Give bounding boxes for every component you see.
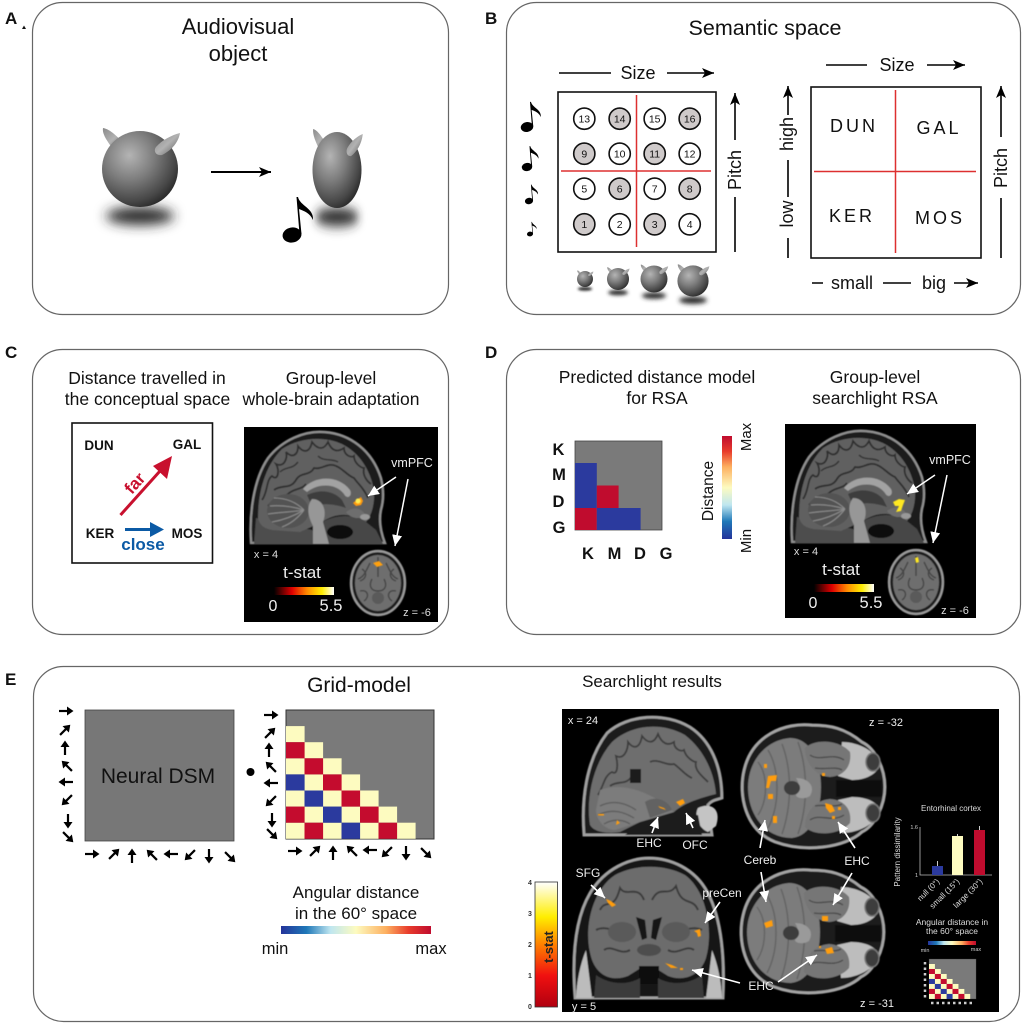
panel C right heading: whole-brain adaptation: [241, 389, 420, 409]
searchlight heading: Searchlight results: [582, 672, 722, 691]
angular distance legend: max: [415, 940, 447, 958]
panel A heading: object: [209, 41, 267, 66]
panel A: audiovisual object: [32, 2, 448, 314]
stimulus grid: 12: [684, 148, 696, 160]
stray marker near label A: [22, 26, 26, 29]
inset legend: angular distance: min: [921, 948, 929, 954]
direction arrows: neural DSM columns: [85, 846, 238, 865]
panel label E: E: [5, 670, 16, 689]
inset legend: angular distance: max: [971, 947, 981, 953]
bar chart: entorhinal cortex: 1.6: [910, 825, 918, 831]
right size axis: [826, 55, 965, 75]
bar chart: entorhinal cortex: Entorhinal cortex: [921, 804, 981, 813]
dot product symbol: [246, 768, 254, 776]
slice coordinates: z = -6: [403, 607, 431, 619]
t-stat colour bar: 5.5: [320, 597, 342, 615]
t-stat colour bar: t-stat: [822, 560, 860, 579]
white pointer arrows: [591, 813, 855, 983]
bar chart: entorhinal cortex: large (30°): [952, 877, 985, 910]
brain: sagittal x = 24: [583, 717, 722, 835]
activation blobs: [353, 497, 383, 567]
icon: music note: [281, 197, 313, 244]
arrow: object morph: [211, 171, 271, 173]
stimulus grid: [558, 92, 716, 252]
panel B frame: [506, 2, 1020, 314]
right pitch axis: Pitch: [991, 148, 1011, 188]
semantic quadrant grid: KER: [829, 206, 875, 226]
t-stat vertical colour bar: 3: [528, 911, 532, 918]
bar chart: entorhinal cortex: null (0°): [915, 877, 942, 903]
label: close: close: [121, 535, 165, 554]
direction arrows: model columns: [288, 843, 434, 861]
left size axis: Size: [620, 63, 656, 83]
neural DSM matrix: [85, 710, 234, 841]
panel E heading: Grid-model: [307, 674, 411, 697]
panel C frame: [32, 350, 448, 634]
stimulus grid: 3: [652, 219, 658, 231]
conceptual space box: [72, 423, 212, 563]
inset legend: angular distance: Angular distance in: [916, 917, 988, 927]
panel D right heading: Group-level: [830, 367, 920, 387]
low-high axis: [777, 86, 797, 258]
label: vmPFC: vmPFC: [929, 453, 971, 467]
stimulus grid: 4: [687, 219, 693, 231]
slice coordinates: [254, 549, 431, 619]
inset legend: angular distance: the 60° space: [926, 926, 978, 936]
t-stat colour bar: t-stat: [283, 563, 321, 582]
semantic quadrant grid: MOS: [915, 208, 965, 228]
anatomical labels: SFG: [576, 866, 600, 880]
arrows to vmPFC: [907, 475, 947, 543]
anatomical labels: Cereb: [744, 853, 777, 867]
stimulus grid: 13: [578, 114, 590, 126]
small-big axis: small: [831, 273, 873, 293]
t-stat colour bar: [809, 560, 882, 612]
slice coordinates: [568, 715, 903, 1013]
activation blobs: [893, 499, 919, 563]
slice coordinates: x = 4: [254, 549, 278, 561]
stimulus grid: 16: [684, 114, 696, 126]
predicted distance matrix: K: [553, 441, 565, 459]
stimulus grid: 11: [649, 148, 660, 160]
angular distance legend: Angular distance: [293, 883, 419, 902]
grid model matrix: [286, 710, 434, 839]
stimulus grid: 7: [652, 184, 658, 196]
activation blobs: [598, 764, 841, 970]
t-stat vertical colour bar: t-stat: [541, 930, 556, 963]
icon: tall creature: [312, 129, 363, 226]
distance colour bar: Min: [738, 529, 755, 553]
panel A heading: Audiovisual: [182, 14, 294, 39]
inset legend: angular distance: [916, 917, 988, 999]
panel D left heading: Predicted distance model: [559, 367, 755, 387]
small-big axis: big: [922, 273, 946, 293]
predicted distance matrix: D: [553, 493, 565, 511]
angular distance legend: [262, 883, 447, 958]
left pitch axis: Pitch: [725, 150, 745, 190]
panel C left heading: Distance travelled in: [68, 368, 226, 388]
label: far: far: [121, 469, 149, 498]
panel C: adaptation: [32, 350, 448, 634]
searchlight brain maps: [562, 709, 999, 1013]
brain: axial z = -31: [741, 870, 884, 993]
slice coordinates: z = -32: [869, 717, 903, 729]
t-stat colour bar: 5.5: [860, 594, 882, 612]
panel C left heading: the conceptual space: [65, 389, 230, 409]
panel label C: C: [5, 343, 17, 362]
distance colour bar: [700, 422, 755, 553]
anatomical labels: [576, 836, 870, 993]
neural DSM matrix: Neural DSM: [101, 765, 215, 788]
stimulus grid: 15: [649, 114, 661, 126]
stimulus grid: 2: [617, 219, 623, 231]
panel D frame: [506, 350, 1020, 634]
angular distance legend: in the 60° space: [295, 904, 417, 923]
slice coordinates: y = 5: [572, 1001, 596, 1013]
conceptual space box: GAL: [173, 437, 201, 452]
direction arrows: model rows: [262, 710, 280, 842]
bar chart: entorhinal cortex: 1: [915, 873, 918, 879]
t-stat vertical colour bar: 0: [528, 1004, 532, 1011]
predicted distance matrix: K: [582, 545, 594, 563]
slice coordinates: x = 4: [794, 546, 818, 558]
brain: coronal y = 5: [574, 858, 724, 998]
bar chart: entorhinal cortex: [893, 804, 992, 911]
stimulus grid: 8: [687, 184, 693, 196]
panel A frame: [32, 2, 448, 314]
predicted distance matrix: M: [608, 545, 621, 563]
anatomical labels: EHC: [748, 979, 774, 993]
predicted distance matrix: D: [634, 545, 646, 563]
conceptual space box: KER: [86, 526, 114, 541]
arrow: close: [125, 528, 152, 531]
t-stat vertical colour bar: [528, 880, 558, 1011]
panel D: RSA: [506, 350, 1020, 634]
panel C right heading: Group-level: [286, 368, 376, 388]
predicted distance matrix: M: [552, 466, 566, 484]
anatomical labels: preCen: [702, 886, 742, 900]
t-stat vertical colour bar: 4: [528, 880, 532, 887]
stimulus grid: 14: [614, 114, 626, 126]
conceptual space box: MOS: [172, 526, 202, 541]
brain map: whole-brain adaptation: [244, 427, 438, 622]
stimulus grid: 6: [617, 184, 623, 196]
brain map: searchlight RSA: [785, 424, 976, 618]
arrow: far: [120, 471, 160, 515]
anatomical labels: EHC: [636, 836, 662, 850]
arrows to vmPFC: [368, 477, 408, 546]
panel label D: D: [485, 343, 497, 362]
slice coordinates: [794, 546, 969, 617]
anatomical labels: EHC: [844, 854, 870, 868]
distance colour bar: Distance: [700, 461, 717, 521]
panel B heading: Semantic space: [689, 16, 841, 40]
label: vmPFC: vmPFC: [391, 456, 433, 470]
inset direction arrows: [925, 962, 975, 1003]
t-stat colour bar: [269, 563, 342, 615]
predicted distance matrix: [552, 441, 672, 563]
panel D left heading: for RSA: [626, 388, 688, 408]
panel E frame: [34, 666, 1020, 1022]
predicted distance matrix: G: [660, 545, 672, 563]
slice coordinates: x = 24: [568, 715, 598, 727]
panel B: semantic space: [506, 2, 1020, 314]
low-high axis: low: [777, 199, 797, 228]
bar chart: entorhinal cortex: Pattern dissimilarity: [893, 817, 902, 887]
distance colour bar: Max: [738, 422, 755, 451]
stimulus grid: 9: [581, 148, 587, 160]
panel D right heading: searchlight RSA: [812, 388, 938, 408]
stimulus grid: 1: [581, 219, 587, 231]
right size axis: Size: [879, 55, 915, 75]
slice coordinates: z = -31: [860, 998, 894, 1010]
slice coordinates: z = -6: [941, 605, 969, 617]
icons: pitch notes: [520, 102, 541, 237]
stimulus grid: 5: [581, 184, 587, 196]
semantic quadrant grid: GAL: [916, 118, 962, 138]
panel label B: B: [485, 9, 497, 28]
stimulus grid: 10: [614, 148, 626, 160]
predicted distance matrix: G: [553, 519, 565, 537]
icons: size creatures: [577, 264, 709, 304]
t-stat colour bar: 0: [269, 598, 278, 615]
t-stat vertical colour bar: 1: [528, 973, 532, 980]
angular distance legend: min: [262, 940, 288, 958]
anatomical labels: OFC: [682, 838, 708, 852]
conceptual space box: DUN: [84, 438, 114, 453]
small-big axis: [812, 273, 978, 293]
semantic quadrant grid: DUN: [830, 116, 878, 136]
panel label A: A: [5, 9, 17, 28]
t-stat colour bar: 0: [809, 595, 818, 612]
direction arrows: neural DSM rows: [57, 706, 76, 845]
bar chart: entorhinal cortex: small (15°): [928, 877, 962, 911]
t-stat vertical colour bar: 2: [528, 942, 532, 949]
icon: round creature: [102, 128, 180, 225]
semantic quadrant grid: [811, 87, 981, 258]
low-high axis: high: [777, 117, 797, 151]
panel E: grid model: [34, 666, 1020, 1022]
brain: axial z = -32: [742, 725, 885, 848]
